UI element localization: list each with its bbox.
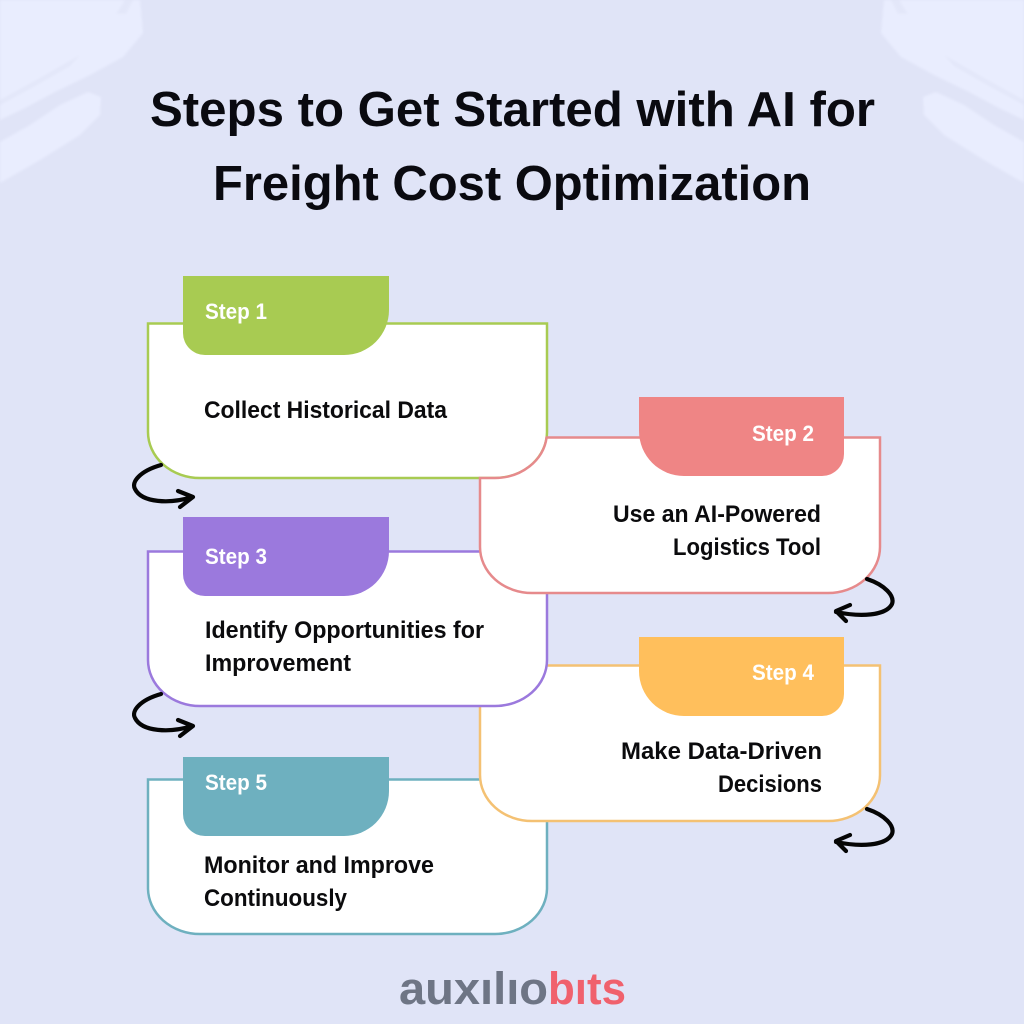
panel: step 1: Collect Historical Data (204, 397, 448, 424)
panel: step 5 (148, 757, 547, 934)
panel: step 3: Improvement (205, 650, 351, 677)
panel: step 5: Monitor and Improve (204, 852, 434, 879)
background texture: left (0, 0, 143, 183)
logo: auxiliobits: auxılıo (399, 963, 548, 1014)
panel: step 4: Make Data-Driven (621, 738, 822, 765)
panel: step 2 (480, 397, 880, 593)
panel: step 5: Continuously (204, 885, 348, 912)
panel: step 4 (480, 637, 880, 821)
panel: step 3 (148, 517, 547, 706)
panel: step 1 (148, 276, 547, 478)
panel: step 2: Logistics Tool (673, 534, 821, 561)
arrow: step 2 to step 3 (836, 579, 893, 621)
title: Steps to Get Started with AI for (150, 83, 875, 137)
panel: step 3: Step 3 (205, 544, 267, 569)
arrow: step 4 to step 5 (836, 809, 893, 851)
panel: step 4: Step 4 (752, 660, 815, 685)
arrow: step 1 to step 2 (134, 465, 193, 507)
panel: step 4: Decisions (718, 771, 822, 798)
logo: auxiliobits (399, 963, 626, 1014)
title: Freight Cost Optimization (213, 157, 811, 211)
panel: step 2: Use an AI-Powered (613, 501, 821, 528)
panel: step 5: Step 5 (205, 770, 267, 795)
background texture: right (881, 0, 1024, 183)
panel: step 2: Step 2 (752, 421, 814, 446)
title (150, 83, 875, 211)
panel: step 3: Identify Opportunities for (205, 617, 484, 644)
panel: step 1: Step 1 (205, 299, 267, 324)
logo: auxiliobits: bıts (548, 963, 626, 1014)
arrow: step 3 to step 4 (134, 694, 193, 736)
